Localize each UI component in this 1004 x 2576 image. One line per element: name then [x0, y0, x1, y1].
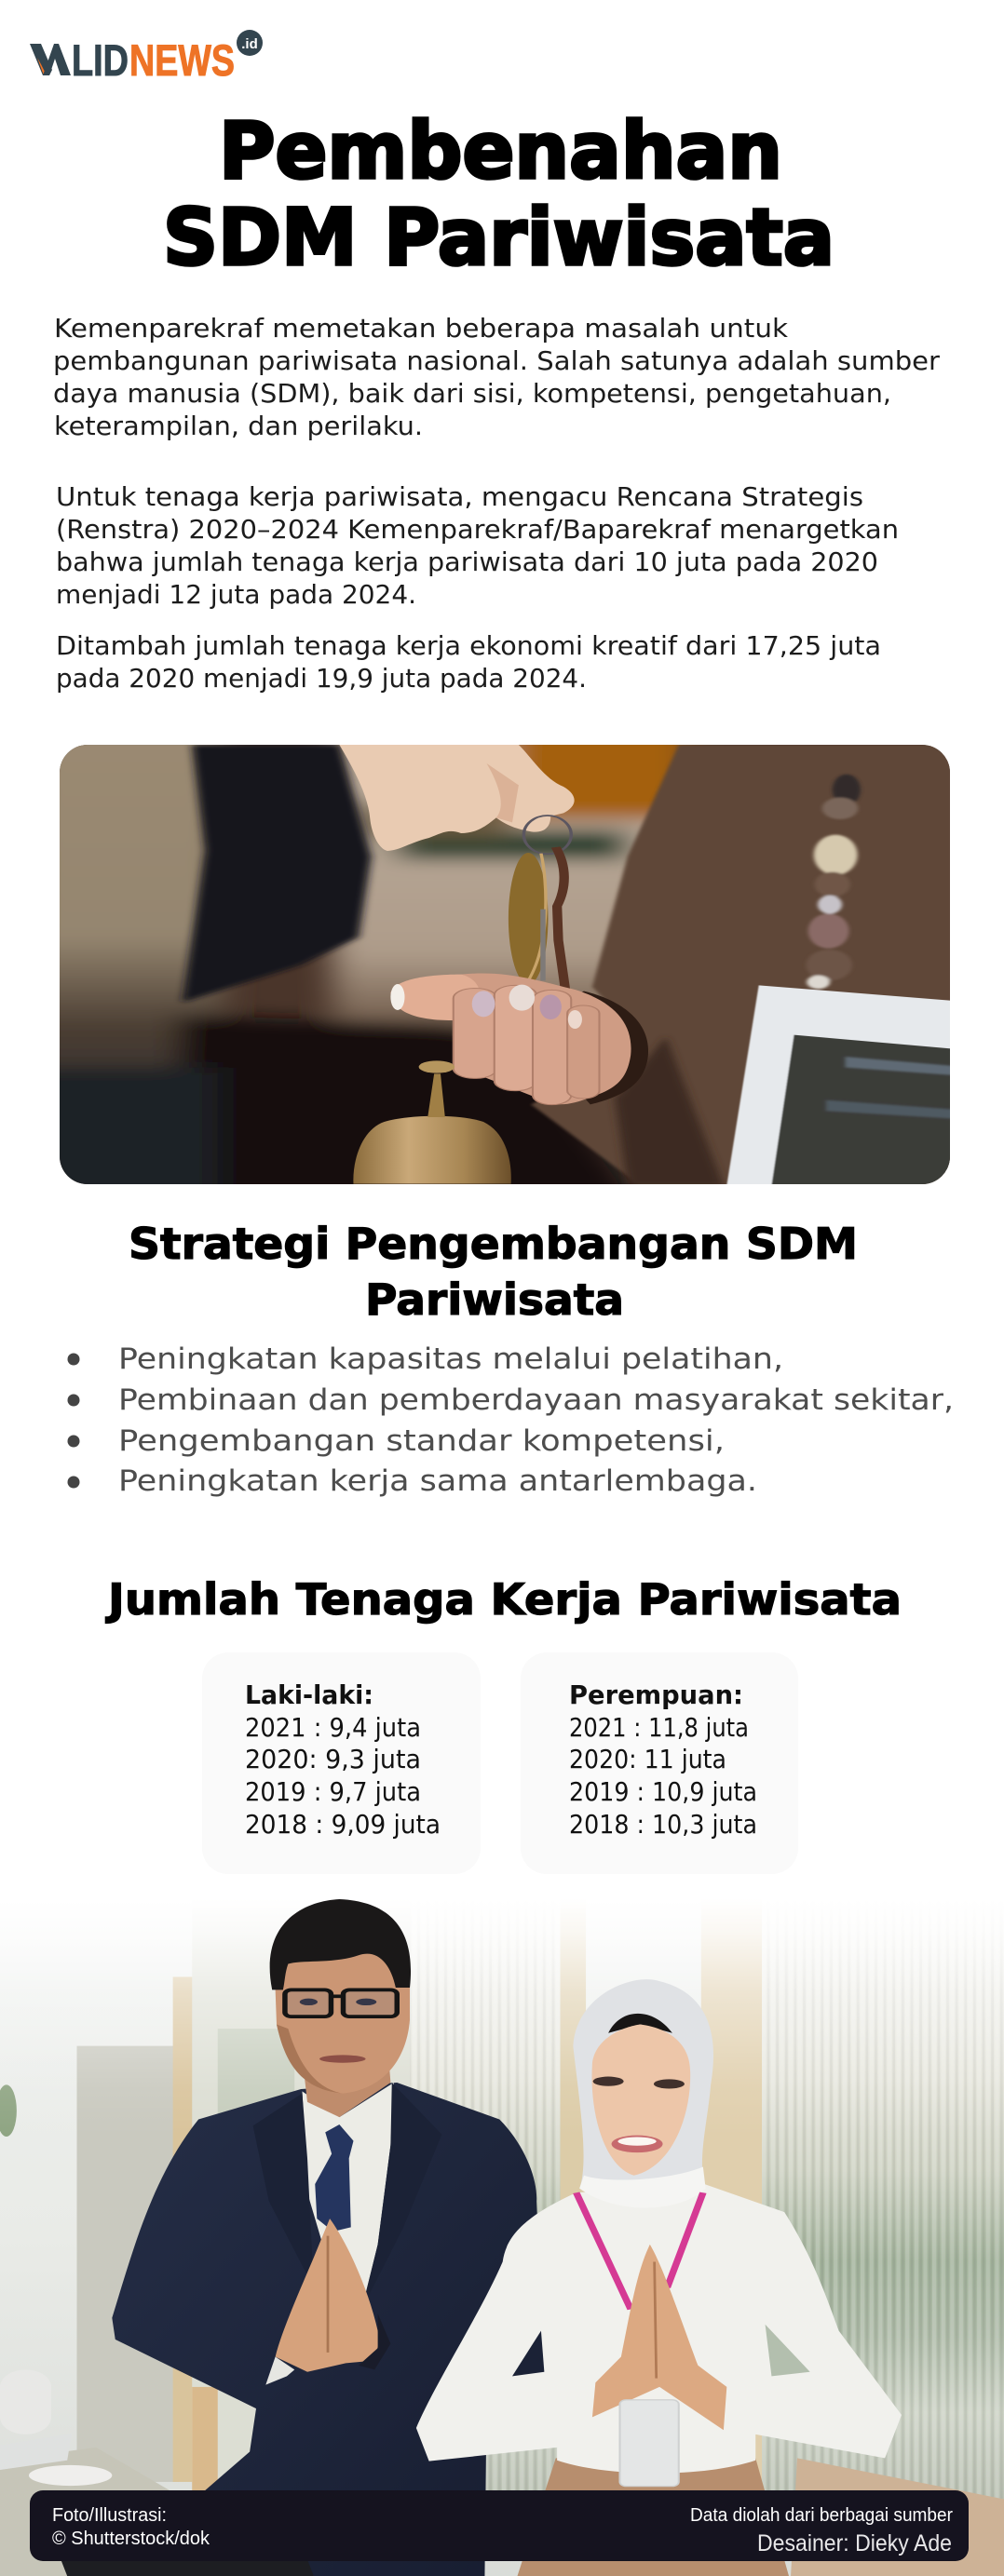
monitor — [726, 985, 954, 1185]
tablet — [0, 2434, 72, 2470]
man shirt — [303, 2083, 394, 2297]
card: male workers: 2020: 9,3 juta — [245, 1744, 421, 1774]
woman skirt — [518, 2458, 789, 2576]
man — [112, 1899, 544, 2576]
logo: Validnews.id — [30, 30, 263, 85]
man suit — [112, 2083, 544, 2576]
bullet 1: Peningkatan kapasitas melalui pelatihan, — [118, 1342, 783, 1376]
lower hand — [390, 973, 648, 1105]
title: SDM Pariwisata — [163, 192, 834, 283]
target paragraph — [56, 481, 899, 610]
photo credit — [52, 2505, 210, 2549]
creative economy paragraph: Ditambah jumlah tenaga kerja ekonomi kreatif dari 17,25 juta — [56, 630, 881, 661]
office background — [0, 1899, 1004, 2576]
intro paragraph: Kemenparekraf memetakan beberapa masalah untuk — [54, 313, 789, 344]
sleeve shading — [766, 2325, 810, 2376]
photo credit: Foto/Illustrasi: — [52, 2505, 167, 2526]
target paragraph: bahwa jumlah tenaga kerja pariwisata dari 10 juta pada 2020 — [56, 546, 878, 577]
dark sleeve — [183, 745, 372, 1003]
target paragraph: (Renstra) 2020–2024 Kemenparekraf/Baparekraf menargetkan — [56, 514, 899, 545]
target paragraph: menjadi 12 juta pada 2024. — [56, 579, 416, 610]
title: Pembenahan — [219, 105, 782, 196]
woman top — [416, 2184, 902, 2474]
source: Data diolah dari berbagai sumber — [690, 2505, 953, 2526]
creative economy paragraph: pada 2020 menjadi 19,9 juta pada 2024. — [56, 663, 587, 694]
wood panel right — [791, 2458, 1004, 2576]
card: male workers — [202, 1652, 481, 1874]
card: female workers: 2020: 11 juta — [569, 1744, 726, 1774]
creative economy paragraph — [56, 630, 881, 694]
logo: Validnews.id: LID — [72, 35, 129, 85]
ID card — [620, 2400, 679, 2487]
card: male workers: 2018 : 9,09 juta — [245, 1809, 441, 1840]
card: male workers: 2019 : 9,7 juta — [245, 1776, 421, 1807]
keys — [509, 816, 571, 999]
palm and sleeve cuff — [582, 991, 648, 1104]
strategy bullet list — [67, 1342, 954, 1498]
intro paragraph — [53, 313, 940, 441]
man glasses — [285, 1989, 397, 2016]
heading: workforce: Jumlah Tenaga Kerja Pariwisata — [105, 1574, 902, 1625]
man hands — [276, 2219, 379, 2372]
woman scarf folds — [579, 2166, 706, 2208]
bullet 2: Pembinaan dan pemberdayaan masyarakat sekitar, — [118, 1383, 954, 1417]
card: female workers: Perempuan: — [569, 1679, 743, 1710]
photo credit: © Shutterstock/dok — [52, 2529, 210, 2549]
man tie — [315, 2124, 354, 2232]
woman face — [592, 2024, 690, 2176]
card: female workers — [521, 1652, 798, 1874]
title — [163, 105, 834, 283]
logo: Validnews.id: NEWS — [129, 35, 235, 85]
heading: strategy: Pariwisata — [365, 1275, 624, 1325]
card: male workers: Laki-laki: — [245, 1679, 373, 1710]
logo mark VA — [30, 44, 71, 75]
card: female workers: 2018 : 10,3 juta — [569, 1809, 757, 1840]
card: female workers: 2021 : 11,8 juta — [569, 1712, 749, 1743]
woman hands — [592, 2245, 726, 2430]
logo: Validnews.id: .id — [241, 36, 258, 52]
man lapels — [253, 2094, 314, 2287]
fingernails — [390, 984, 582, 1029]
necklace beads — [807, 775, 861, 989]
lanyard — [577, 2192, 703, 2309]
thumb — [390, 975, 480, 1020]
fingers — [454, 989, 497, 1078]
upper hand — [339, 745, 575, 851]
man neck and face — [301, 2042, 390, 2117]
heading: strategy — [129, 1219, 858, 1325]
keyboard under bar — [61, 2559, 314, 2576]
bullet 4: Peningkatan kerja sama antarlembaga. — [118, 1464, 757, 1498]
woman hijab — [573, 1979, 713, 2205]
heading: strategy: Strategi Pengembangan SDM — [129, 1219, 858, 1269]
designer: Desainer: Dieky Ade — [757, 2530, 952, 2556]
bullet 3: Pengembangan standar kompetensi, — [118, 1424, 725, 1458]
brown shirt — [532, 745, 954, 1185]
card: male workers: 2021 : 9,4 juta — [245, 1712, 421, 1743]
desk left — [0, 2448, 410, 2576]
intro paragraph: daya manusia (SDM), baik dari sisi, kompetensi, pengetahuan, — [53, 378, 891, 409]
card: female workers: 2019 : 10,9 juta — [569, 1776, 757, 1807]
intro paragraph: pembangunan pariwisata nasional. Salah satunya adalah sumber — [53, 345, 940, 376]
target paragraph: Untuk tenaga kerja pariwisata, mengacu Rencana Strategis — [56, 481, 863, 512]
photo: handing over hotel key — [60, 745, 950, 1184]
photo: hotel staff greeting — [0, 1898, 1004, 2576]
top white fade — [0, 1898, 1004, 2576]
man watch — [359, 2313, 390, 2369]
intro paragraph: keterampilan, dan perilaku. — [54, 411, 423, 441]
woman — [416, 1979, 902, 2576]
footer bar — [30, 2490, 969, 2561]
man cuff — [265, 2356, 294, 2385]
bell — [353, 1060, 511, 1184]
